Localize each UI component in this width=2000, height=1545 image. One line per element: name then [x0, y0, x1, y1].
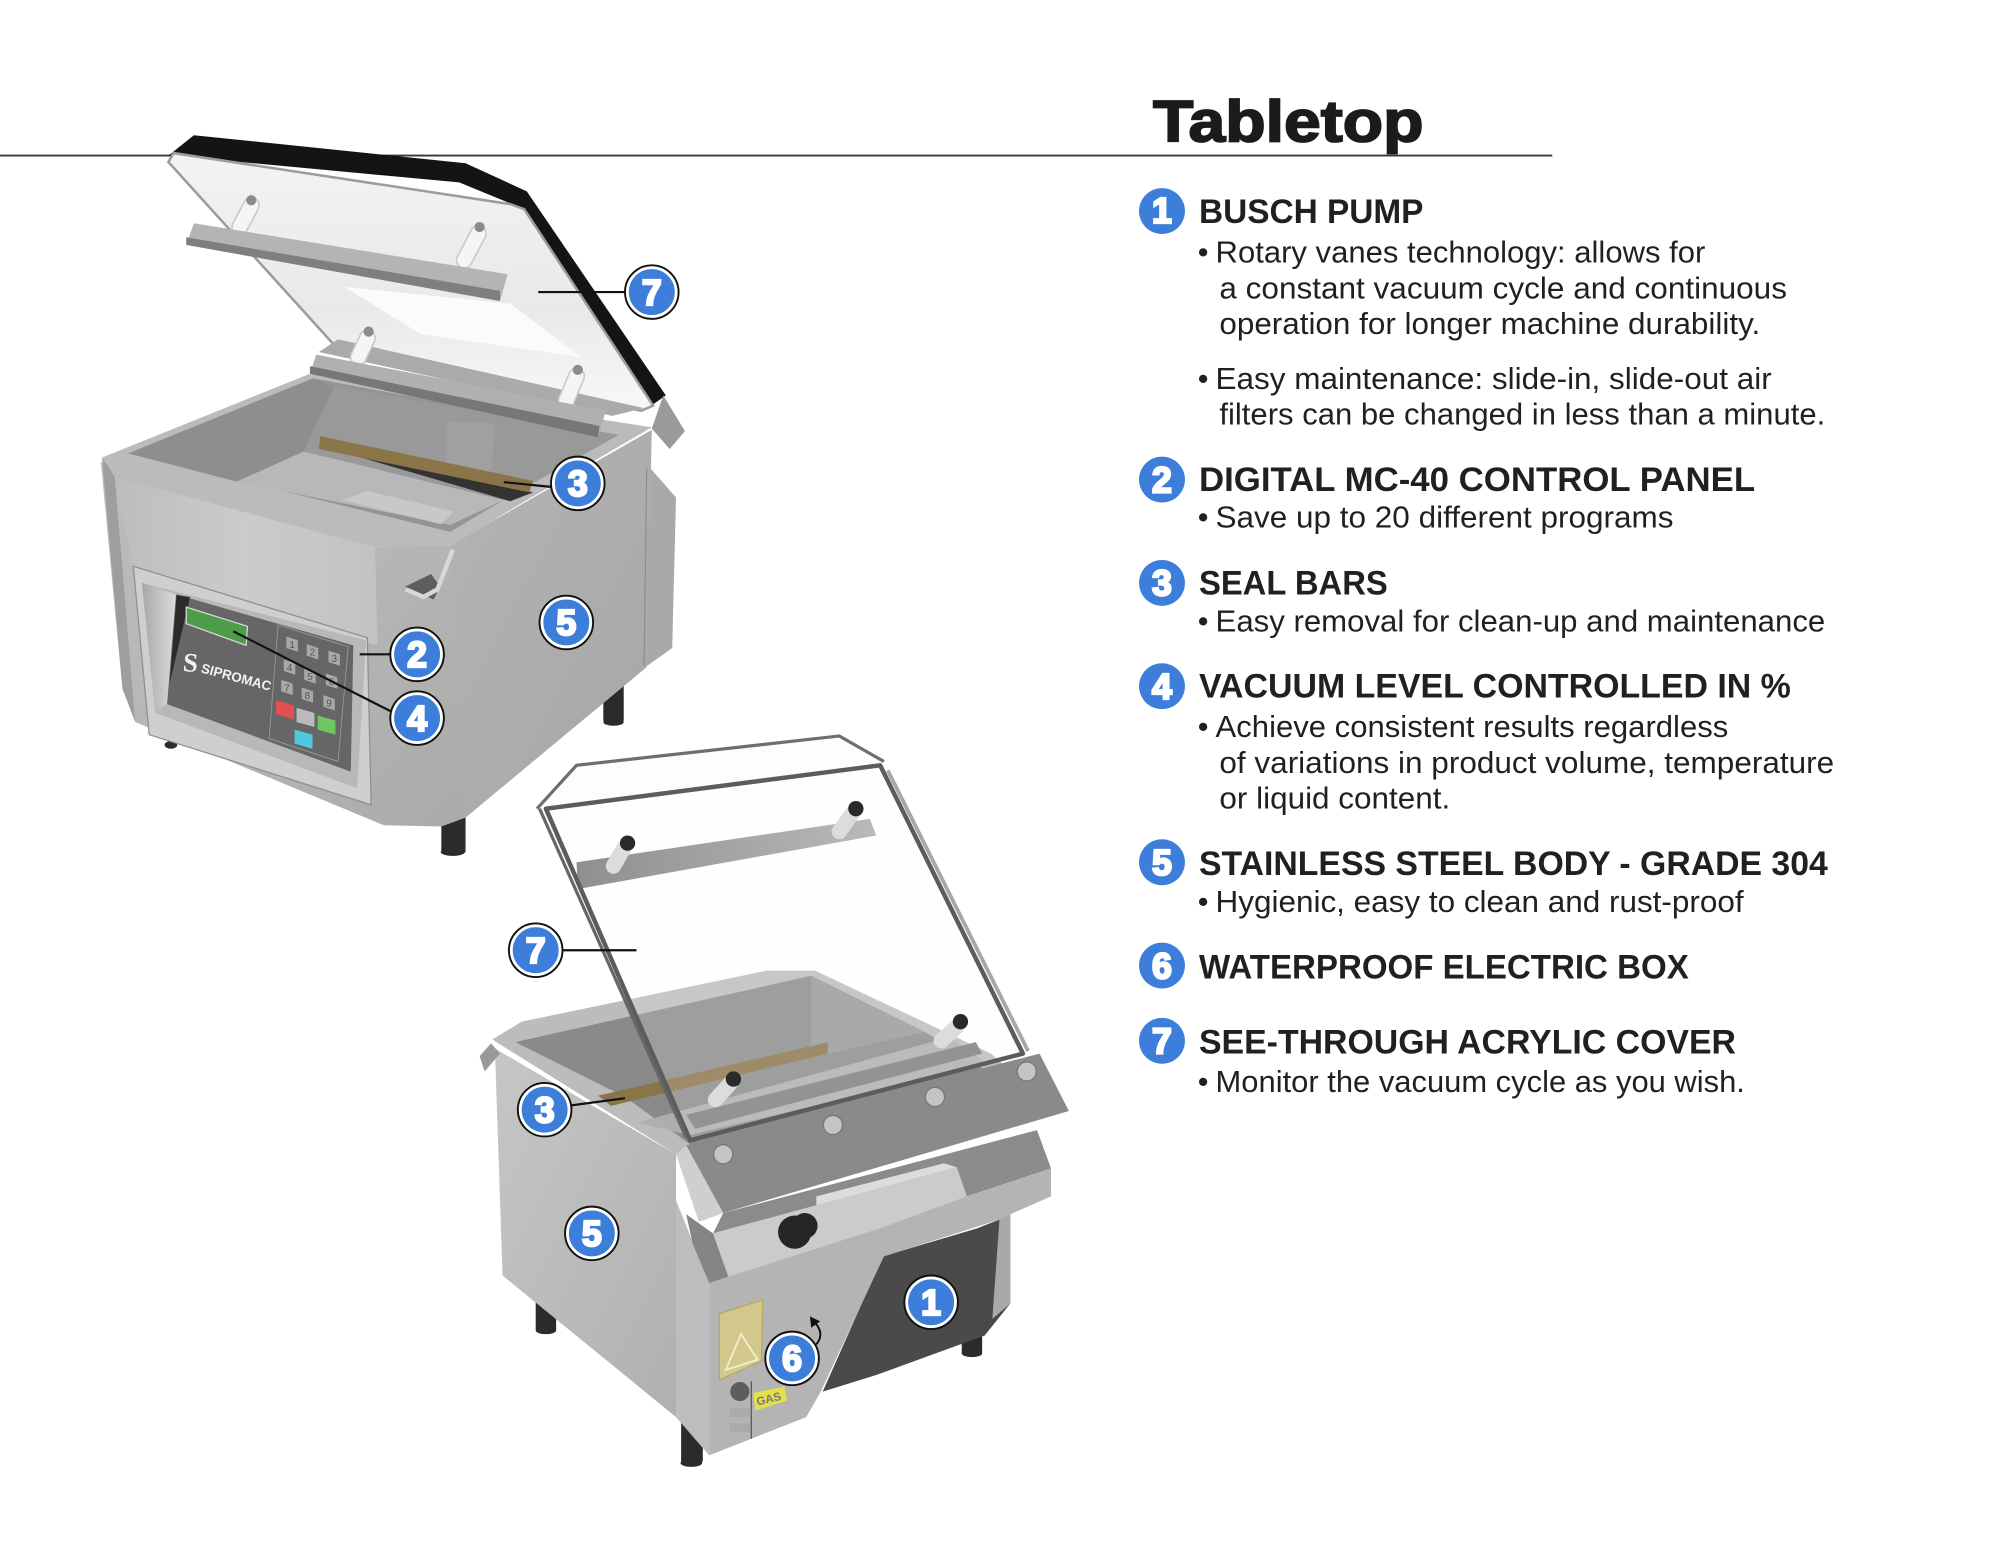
keypad: 3 — [331, 654, 337, 665]
callout 5 cover machine — [565, 1207, 619, 1260]
callout 7 cover: 7 — [526, 931, 546, 971]
item 4: vacuum level — [1139, 663, 1834, 816]
keypad: 1 — [289, 640, 295, 651]
item 4: vacuum level: • — [1198, 710, 1208, 744]
connectors — [730, 1381, 751, 1439]
legs — [536, 1295, 982, 1467]
item 5: stainless steel body: 5 — [1152, 843, 1172, 883]
seal bar — [319, 445, 533, 501]
item 4: vacuum level: 4 — [1152, 667, 1172, 707]
hinge — [480, 1043, 500, 1071]
logo: SIPROMAC — [199, 661, 273, 694]
item 2: control panel: • — [1198, 500, 1208, 534]
callout 3 lid machine: 3 — [568, 464, 588, 504]
item 1: Busch pump: Easy maintenance: slide-in, slide-out air — [1216, 362, 1772, 396]
item 6: electric box: 6 — [1152, 946, 1172, 986]
display — [186, 607, 247, 645]
gas label — [753, 1386, 787, 1411]
lower bar — [310, 355, 606, 438]
seal bar — [598, 1042, 828, 1106]
callout 2: 2 — [407, 635, 427, 675]
item 4: vacuum level: or liquid content. — [1219, 782, 1450, 816]
item 7: acrylic cover: Monitor the vacuum cycle as you wish. — [1216, 1065, 1745, 1099]
rim — [103, 374, 652, 547]
upper bar — [186, 223, 508, 301]
control panel — [133, 566, 371, 805]
knob — [778, 1213, 818, 1249]
item 1: Busch pump: • — [1198, 236, 1208, 270]
item 3: seal bars: SEAL BARS — [1199, 564, 1388, 602]
item 1: Busch pump: filters can be changed in less than a minute. — [1219, 398, 1825, 432]
machine: tabletop with clear acrylic cover — [480, 736, 1069, 1467]
callout 5 lid machine — [540, 596, 593, 649]
rear plate — [709, 1167, 1051, 1455]
item 5: stainless steel body: • — [1198, 885, 1208, 919]
keypad: 5 — [307, 672, 313, 683]
header rule — [0, 155, 1552, 157]
item 7: acrylic cover: • — [1198, 1065, 1208, 1099]
callout 6 with arrow: 6 — [782, 1339, 802, 1379]
keypad: 4 — [287, 663, 293, 674]
keypad — [269, 625, 348, 761]
back panel — [645, 466, 676, 667]
callout 4: 4 — [407, 699, 427, 739]
chamber — [128, 378, 619, 532]
item 4: vacuum level: of variations in product volume, temperature — [1219, 746, 1834, 780]
item 1: Busch pump: 1 — [1152, 191, 1172, 231]
callout 5 cover machine: 5 — [582, 1214, 602, 1254]
keypad: 8 — [305, 691, 311, 702]
back panel — [676, 1200, 709, 1455]
hinge — [652, 395, 685, 449]
callout 7 lid: 7 — [642, 273, 662, 313]
item 2: control panel: Save up to 20 different programs — [1216, 500, 1673, 534]
item 7: acrylic cover: SEE-THROUGH ACRYLIC COVER — [1199, 1024, 1736, 1062]
posts — [240, 205, 577, 401]
callout 3 cover machine — [518, 1083, 625, 1136]
item 7: acrylic cover — [1139, 1018, 1745, 1099]
rim — [492, 971, 1040, 1213]
item 5: stainless steel body: Hygienic, easy to clean and rust-proof — [1216, 885, 1744, 919]
callout 2 — [360, 628, 444, 681]
item 5: stainless steel body: STAINLESS STEEL BODY - GRADE 304 — [1199, 845, 1828, 883]
control panel: S — [182, 647, 199, 678]
item 2: control panel — [1139, 457, 1755, 534]
callout 1: 1 — [921, 1283, 941, 1323]
item 2: control panel: DIGITAL MC-40 CONTROL PANEL — [1199, 461, 1755, 499]
legs — [165, 682, 624, 856]
mechanism gap — [713, 1130, 1051, 1233]
callout 3 cover machine: 3 — [535, 1090, 555, 1130]
item 3: seal bars: 3 — [1152, 564, 1172, 604]
upper bar — [577, 819, 876, 889]
callout 1 — [904, 1276, 958, 1329]
callout 3 lid machine — [504, 457, 605, 510]
item 3: seal bars: Easy removal for clean-up and maintenance — [1216, 604, 1825, 638]
item 1: Busch pump: operation for longer machine durability. — [1219, 307, 1760, 341]
latch — [405, 550, 453, 599]
item 1: Busch pump: a constant vacuum cycle and continuous — [1219, 271, 1787, 305]
callout 4 — [233, 631, 444, 745]
item 5: stainless steel body — [1139, 839, 1828, 919]
item 1: Busch pump: • — [1198, 362, 1208, 396]
corner and front panel — [101, 462, 466, 827]
item 4: vacuum level: VACUUM LEVEL CONTROLLED IN % — [1199, 668, 1791, 706]
keypad: 6 — [329, 677, 335, 688]
gas label: GAS — [755, 1391, 783, 1409]
item 3: seal bars: • — [1198, 604, 1208, 638]
item 7: acrylic cover: 7 — [1152, 1022, 1172, 1062]
item 4: vacuum level: Achieve consistent results regardless — [1216, 710, 1728, 744]
lower cover bar — [686, 1042, 982, 1129]
callout 7 cover — [509, 923, 636, 977]
callout 5 lid machine: 5 — [556, 603, 576, 643]
keypad: 2 — [310, 648, 316, 659]
bracket plate — [676, 1054, 1069, 1222]
acrylic cover — [537, 736, 1032, 1140]
item 1: Busch pump: BUSCH PUMP — [1199, 193, 1423, 231]
chamber — [515, 976, 1008, 1148]
item 3: seal bars — [1139, 560, 1825, 638]
keypad: 9 — [326, 699, 332, 710]
posts — [614, 814, 957, 1099]
item 6: electric box: WATERPROOF ELECTRIC BOX — [1199, 948, 1689, 986]
item 2: control panel: 2 — [1152, 460, 1172, 500]
warning label — [719, 1300, 763, 1380]
callout 6 with arrow — [765, 1316, 820, 1385]
item 1: Busch pump: Rotary vanes technology: allows for — [1216, 236, 1705, 270]
callout 7 lid — [538, 265, 679, 319]
item 1: Busch pump — [1139, 188, 1825, 432]
title: Tabletop — [1153, 90, 1423, 155]
lid — [168, 135, 685, 449]
machine: tabletop with tinted lid — [101, 135, 685, 856]
keypad: 7 — [284, 683, 290, 694]
side panel — [449, 430, 652, 818]
left side panel — [495, 1048, 676, 1417]
back pump — [823, 1214, 1010, 1392]
